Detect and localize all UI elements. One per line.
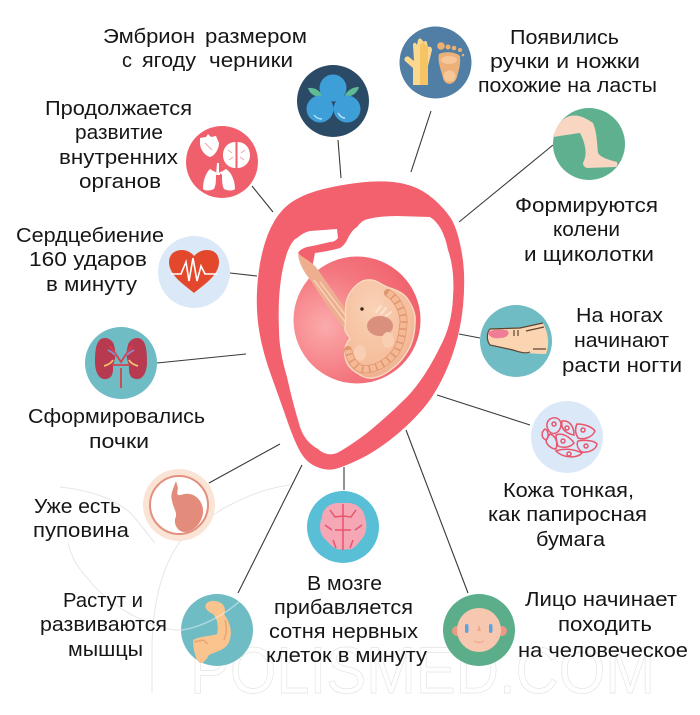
text: brain: [266, 572, 428, 667]
text: muscles: развиваются: [40, 613, 167, 636]
icon: heart rate: [158, 236, 230, 308]
embryo eye: [360, 307, 364, 311]
icon: embryo with umbilical cord: [143, 469, 215, 541]
text: hands and feet: [478, 26, 657, 97]
embryo spine segments: [348, 293, 404, 369]
text: heartbeat: 160 ударов: [29, 248, 147, 271]
icon: muscle arm: [181, 594, 253, 666]
text: berry size: с: [122, 49, 132, 72]
text: internal organs: внутренних: [59, 146, 179, 169]
text: berry size: ягоду: [142, 49, 197, 72]
text: brain: В мозге: [307, 572, 382, 595]
text: internal organs: органов: [79, 170, 161, 193]
text: hands and feet: похожие на ласты: [478, 74, 657, 97]
uterus: [257, 181, 464, 470]
text: umbilical cord: Уже есть: [34, 495, 121, 518]
umbilical cord: [298, 254, 358, 336]
text: internal organs: развитие: [75, 121, 163, 144]
text: hands and feet: ручки и ножки: [490, 50, 640, 73]
text: skin: бумага: [536, 528, 606, 551]
text: berry size: черники: [209, 49, 293, 72]
text: heartbeat: [16, 224, 164, 296]
text: skin: [488, 479, 647, 551]
watermark: POLISMED.COM: [190, 633, 655, 707]
watermark: [60, 485, 655, 707]
text: kidneys: [28, 405, 205, 453]
icon: blueberries: [297, 65, 369, 137]
text: muscles: Растут и: [63, 589, 143, 612]
text: muscles: [40, 589, 167, 661]
text: face: [518, 588, 688, 662]
icon: internal organs: [186, 126, 258, 198]
text: toenails: На ногах: [576, 304, 664, 327]
text: knees: и щиколотки: [524, 243, 654, 266]
text: skin: как папиросная: [488, 503, 647, 526]
icon: leg: [553, 108, 625, 180]
text: face: Лицо начинает: [525, 588, 678, 611]
text: toenails: начинают: [574, 329, 670, 352]
text: kidneys: почки: [89, 430, 149, 453]
icon: hands and feet: [400, 26, 472, 98]
text: face: на человеческое: [518, 639, 688, 662]
text: skin: Кожа тонкая,: [503, 479, 634, 502]
text: berry size: размером: [205, 25, 307, 48]
icon: skin cells: [531, 401, 603, 473]
icon: kidneys: [85, 327, 157, 399]
icon: toenail: [480, 305, 552, 377]
text: kidneys: Сформировались: [28, 405, 205, 428]
text: hands and feet: Появились: [510, 26, 619, 49]
text: internal organs: Продолжается: [45, 97, 192, 120]
text: brain: прибавляется: [274, 596, 413, 619]
text: toenails: расти ногти: [562, 354, 682, 377]
embryo heart region: [367, 316, 393, 336]
text: heartbeat: в минуту: [46, 273, 138, 296]
text: brain: клеток в минуту: [266, 644, 428, 667]
embryo body: [345, 280, 415, 378]
text: berry size: [103, 25, 307, 72]
text: umbilical cord: [33, 495, 130, 542]
icon: baby face: [443, 594, 515, 666]
embryo: [298, 254, 415, 378]
text: knees: колени: [553, 218, 620, 241]
text: berry size: Эмбрион: [103, 25, 195, 48]
text: umbilical cord: пуповина: [33, 519, 130, 542]
text: heartbeat: Сердцебиение: [16, 224, 164, 247]
text: toenails: [562, 304, 682, 377]
connector lines: [157, 111, 553, 593]
amniotic sac: [294, 256, 420, 384]
text: muscles: мышцы: [68, 638, 143, 661]
text: internal organs: [45, 97, 192, 193]
text: knees: Формируются: [515, 194, 658, 217]
text: brain: сотня нервных: [269, 620, 419, 643]
icon: brain: [307, 491, 379, 563]
text: knees: [515, 194, 658, 266]
text: face: походить: [558, 613, 652, 636]
